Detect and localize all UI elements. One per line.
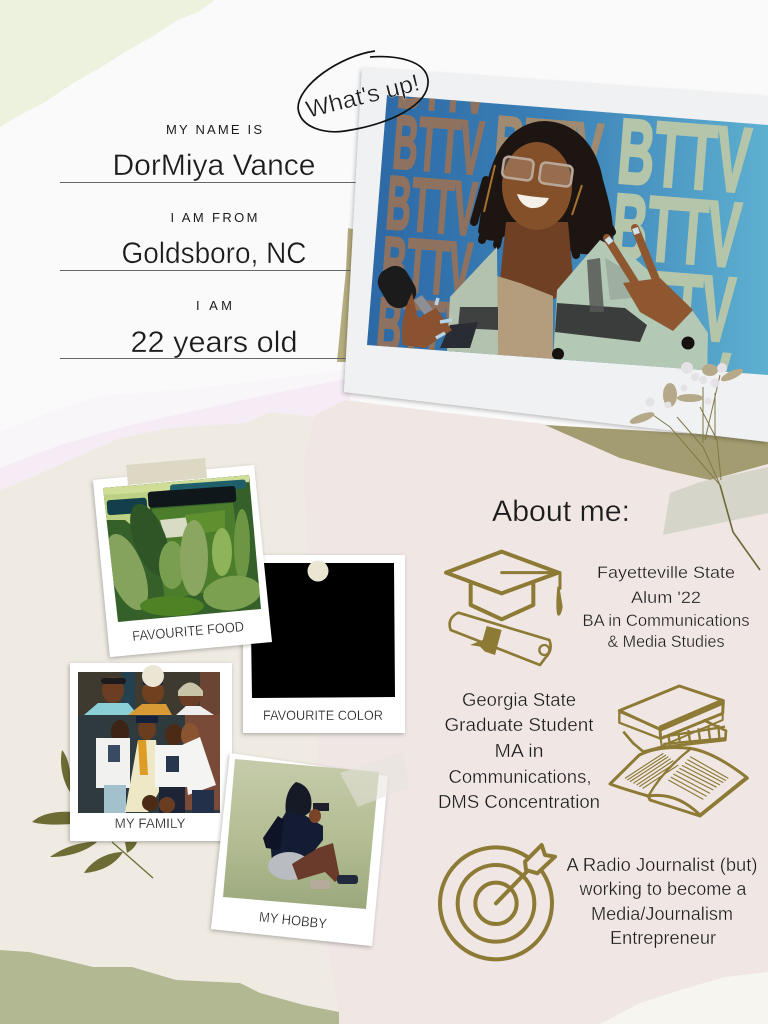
jacket left: [447, 247, 498, 356]
flower sprig: [628, 362, 760, 570]
neck: [500, 222, 574, 302]
torn paper: olive right: [545, 425, 768, 480]
hair: [285, 782, 311, 818]
glasses: [502, 156, 573, 187]
tank top: [497, 276, 553, 360]
text: fayetteville state: [582, 563, 750, 651]
photo: photographer on grass: [223, 759, 379, 909]
caption: MY FAMILY: [114, 815, 186, 831]
icon: target with arrow: [440, 845, 555, 959]
photo: pickle jars: [103, 475, 261, 622]
hand: holding microphone: [402, 293, 452, 348]
icon: graduation cap and diploma: [446, 552, 563, 665]
face: [502, 142, 572, 230]
legs: [292, 843, 340, 882]
text: i am: I AM: [196, 298, 232, 313]
torn paper: top left green: [0, 0, 215, 127]
bottom row people: [111, 720, 129, 738]
hand: peace sign: [607, 228, 693, 331]
torn paper: pink right panel: [303, 400, 768, 1024]
shoes: [310, 880, 330, 889]
text: radio journalist: working to become a: [578, 879, 747, 899]
text: georgia state: Graduate Student: [444, 715, 594, 735]
text: georgia state: DMS Concentration: [438, 792, 600, 812]
heading: about me: About me:: [492, 495, 630, 528]
smile: [517, 194, 549, 208]
frame: [70, 663, 232, 841]
torn paper: lavender band: [0, 378, 350, 495]
tape on hobby polaroid: [340, 752, 410, 807]
skirt: [268, 852, 304, 880]
text: name: DorMiya Vance: [112, 149, 316, 182]
photo: smiling woman with microphone: BTTV: [390, 100, 487, 192]
frame: [243, 555, 405, 733]
photo: smiling woman with microphone: [367, 95, 768, 375]
speech ellipse: [298, 51, 428, 132]
torn paper: bottom right white: [600, 972, 768, 1024]
photo: smiling woman with microphone: BTTV: [383, 160, 480, 252]
text: my name is: MY NAME IS: [166, 122, 262, 137]
pin: [308, 560, 328, 582]
text: fayetteville state: Alum '22: [631, 588, 701, 607]
hair: [474, 121, 613, 255]
polaroid frame: [344, 68, 768, 442]
frame: [211, 753, 388, 946]
torn paper: olive strip behind photo: [337, 228, 356, 362]
face and hands: [309, 809, 321, 823]
icon: stack of books: [610, 686, 748, 816]
torn paper: translucent tape right: [663, 467, 768, 535]
polaroid: favourite food: [93, 465, 272, 657]
photo: smiling woman with microphone: BTTV: [378, 221, 475, 313]
text: radio journalist: [566, 855, 758, 948]
tape on food polaroid: [126, 458, 207, 485]
torso: [270, 812, 323, 862]
photo: family collage: [78, 672, 220, 813]
jacket right: [553, 240, 708, 372]
photo: smiling woman with microphone: BTTV: [374, 282, 470, 374]
polaroid: my hobby: [211, 753, 388, 946]
backpack: [263, 816, 284, 850]
top row faces: [102, 677, 124, 703]
torn paper: bottom left green: [0, 950, 339, 1024]
caption: FAVOURITE COLOR: [263, 707, 383, 723]
text: georgia state: [438, 690, 600, 812]
text: georgia state: Georgia State: [462, 690, 576, 710]
text: radio journalist: A Radio Journalist (but): [566, 855, 758, 875]
text: fayetteville state: BA in Communications: [582, 611, 750, 630]
black swatch: [250, 563, 395, 698]
microphone: [373, 261, 478, 348]
text: fayetteville state: & Media Studies: [608, 632, 724, 651]
torn paper: beige lower left: [0, 412, 345, 1024]
caption: FAVOURITE FOOD: [132, 618, 245, 644]
callout: what's up: [298, 51, 428, 132]
text: radio journalist: Media/Journalism: [591, 904, 733, 924]
text: radio journalist: Entrepreneur: [610, 928, 716, 948]
leaves behind family photo: [32, 750, 153, 878]
photo: smiling woman with microphone: BTTV: [491, 101, 606, 194]
pin: [142, 665, 164, 687]
photo: smiling woman with microphone: BTTV: [395, 39, 491, 131]
text: georgia state: MA in: [494, 741, 544, 761]
camera: [313, 803, 329, 811]
caption: MY HOBBY: [258, 908, 328, 932]
polaroid: favourite color: [243, 555, 405, 733]
name rules: [60, 182, 360, 358]
polaroid: my family: [70, 663, 232, 841]
torn paper: pale lavender band: [0, 368, 360, 495]
text: age: 22 years old: [130, 326, 298, 359]
text: hometown: Goldsboro, NC: [122, 237, 306, 270]
text: georgia state: Communications,: [448, 767, 592, 787]
text: fayetteville state: Fayetteville State: [597, 563, 735, 582]
main polaroid: [344, 39, 768, 442]
frame: [93, 465, 272, 657]
callout text: What's up!: [303, 69, 422, 124]
jacket buttons: [552, 336, 694, 360]
text: i am from: I AM FROM: [170, 210, 258, 225]
